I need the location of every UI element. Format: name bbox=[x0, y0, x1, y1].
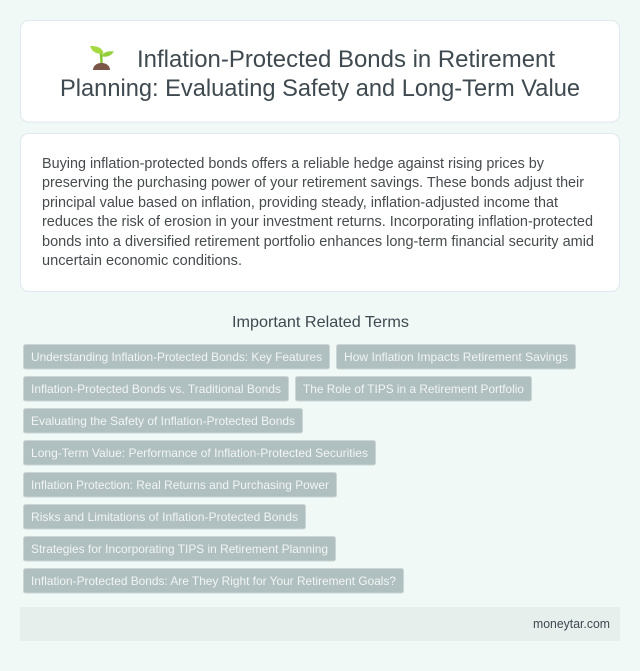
panel: title card bbox=[20, 20, 620, 122]
title text: Inflation-Protected Bonds in Retirement bbox=[137, 46, 555, 73]
tag bbox=[24, 568, 404, 593]
footer bar: moneytar.com bbox=[533, 617, 610, 631]
tag bbox=[24, 344, 330, 369]
heading: important related terms: Important Related Terms bbox=[232, 314, 409, 331]
title text bbox=[60, 46, 580, 102]
panel: intro paragraph: uncertain economic conditions. bbox=[42, 253, 242, 269]
panel: intro paragraph bbox=[20, 134, 620, 292]
panel: intro paragraph: reduces the risk of erosion in your investment returns. Incorporating inflation-protected bbox=[42, 214, 593, 230]
tag: Strategies for Incorporating TIPS in Retirement Planning bbox=[31, 542, 328, 556]
panel: intro paragraph: preserving the purchasing power of your retirement savings. These bonds adjust their bbox=[42, 175, 584, 191]
panel: related terms tags bbox=[24, 344, 576, 593]
panel: intro paragraph: principal value based on inflation, providing steady, inflation-adjusted income that bbox=[42, 195, 558, 211]
tag bbox=[24, 440, 376, 465]
tag: Inflation Protection: Real Returns and Purchasing Power bbox=[31, 478, 329, 492]
icon: sprout bbox=[90, 46, 114, 70]
tag bbox=[24, 472, 336, 497]
tag bbox=[24, 376, 288, 401]
tag: The Role of TIPS in a Retirement Portfolio bbox=[303, 382, 524, 396]
tag bbox=[24, 408, 302, 433]
panel: intro paragraph: Buying inflation-protected bonds offers a reliable hedge against rising prices by bbox=[42, 156, 545, 172]
panel: intro paragraph: bonds into a diversified retirement portfolio enhances long-term financial security amid bbox=[42, 234, 594, 250]
tag: Inflation-Protected Bonds: Are They Right for Your Retirement Goals? bbox=[31, 574, 396, 588]
tag: Risks and Limitations of Inflation-Protected Bonds bbox=[31, 510, 298, 524]
tag: Inflation-Protected Bonds vs. Traditional Bonds bbox=[31, 382, 281, 396]
tag bbox=[24, 536, 336, 561]
tag: Understanding Inflation-Protected Bonds: Key Features bbox=[31, 350, 322, 364]
footer bar bbox=[20, 607, 620, 641]
tag: Long-Term Value: Performance of Inflation-Protected Securities bbox=[31, 446, 368, 460]
tag bbox=[24, 504, 306, 529]
tag: Evaluating the Safety of Inflation-Protected Bonds bbox=[31, 414, 295, 428]
tag bbox=[296, 376, 532, 401]
title text: Planning: Evaluating Safety and Long-Term Value bbox=[60, 75, 580, 102]
tag bbox=[336, 344, 576, 369]
tag: How Inflation Impacts Retirement Savings bbox=[344, 350, 568, 364]
